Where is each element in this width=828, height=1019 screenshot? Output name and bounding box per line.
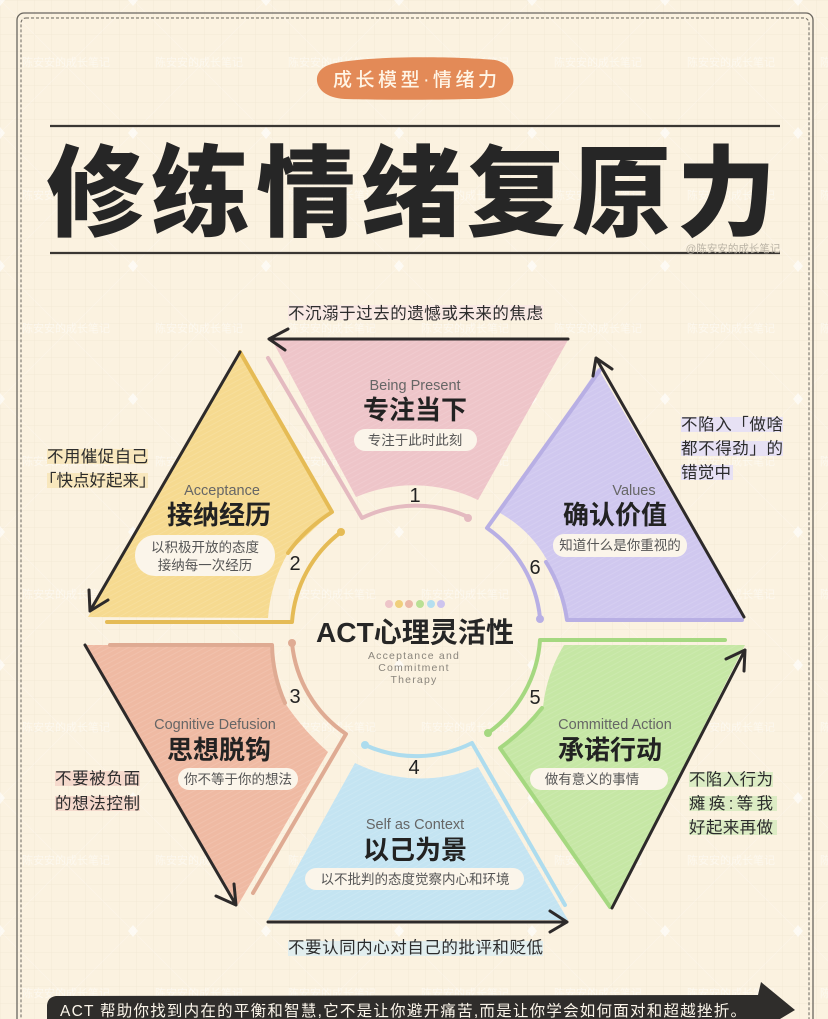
segment 4: self as context: 4	[408, 757, 420, 779]
center label: ACT: Therapy	[391, 674, 437, 686]
segment 1: being present: 1	[409, 485, 421, 507]
segment 1: being present: 专注于此时此刻	[368, 433, 462, 448]
note: left lower	[55, 769, 140, 813]
note: top: 不沉溺于过去的遗憾或未来的焦虑	[288, 304, 543, 323]
center label: ACT	[316, 600, 514, 686]
badge: growth model: 成长模型·情绪力	[333, 69, 497, 91]
segment 6: values	[487, 368, 744, 623]
note: right lower: 好起来再做	[689, 818, 774, 837]
segment 4: self as context	[268, 741, 568, 920]
note: left upper: 「快点好起来」	[40, 471, 156, 490]
segment 2: acceptance: 以积极开放的态度	[151, 540, 259, 555]
badge: growth model	[317, 57, 513, 100]
segment 3: cognitive defusion: 思想脱钩	[167, 735, 271, 765]
segment 5: committed action: 5	[529, 687, 541, 709]
segment 5: committed action: Committed Action	[558, 717, 672, 733]
segment 2: acceptance: 接纳每一次经历	[158, 557, 252, 573]
segment 5: committed action: 承诺行动	[558, 735, 662, 765]
bottom banner arrow	[47, 982, 795, 1019]
segment 2: acceptance: 接纳经历	[167, 500, 271, 530]
note: left upper	[40, 447, 156, 490]
arrow: purple side	[593, 358, 744, 617]
segment 3: cognitive defusion: 你不等于你的想法	[184, 771, 292, 787]
note: left lower: 的想法控制	[55, 794, 140, 813]
note: right upper: 都不得劲」的	[681, 439, 783, 458]
segment 1: being present: 专注当下	[363, 395, 467, 425]
segment 6: values: 6	[529, 557, 541, 579]
segment 1: being present	[268, 340, 568, 522]
note: right lower: 不陷入行为	[689, 770, 773, 789]
note: right upper: 不陷入「做啥	[681, 415, 784, 434]
note: right upper	[681, 415, 784, 482]
note: left lower: 不要被负面	[55, 769, 140, 788]
note: bottom: 不要认同内心对自己的批评和贬低	[288, 938, 543, 957]
title: @陈安安的成长笔记	[686, 242, 781, 255]
segment 6: values: 确认价值	[563, 500, 667, 530]
arrow: salmon side	[85, 645, 236, 905]
note: left upper: 不用催促自己	[47, 447, 148, 466]
note: right lower	[689, 770, 777, 837]
segment 4: self as context: 以己为景	[363, 835, 467, 865]
segment 3: cognitive defusion: Cognitive Defusion	[154, 717, 276, 733]
center label: ACT: Commitment	[378, 662, 450, 674]
segment 2: acceptance: Acceptance	[184, 483, 260, 499]
segment 6: values: Values	[612, 483, 656, 499]
segment 3: cognitive defusion: 3	[289, 686, 301, 708]
note: right lower: 瘫痪:等我	[689, 794, 773, 813]
center label: ACT: ACT心理灵活性	[316, 617, 514, 648]
segment 2: acceptance	[88, 352, 345, 622]
segment 3: cognitive defusion	[85, 639, 346, 905]
segment 2: acceptance: 2	[289, 553, 301, 575]
segment 1: being present: Being Present	[369, 378, 461, 394]
segment 5: committed action: 做有意义的事情	[545, 771, 639, 787]
colour dots	[385, 600, 445, 608]
note: right upper: 错觉中	[681, 463, 731, 482]
arrow: yellow side	[89, 352, 240, 611]
center label: ACT: Acceptance and	[368, 650, 460, 662]
arrow: green side	[612, 650, 745, 908]
segment 4: self as context: 以不批判的态度觉察内心和环境	[320, 871, 510, 887]
segment 4: self as context: Self as Context	[366, 817, 464, 833]
segment 6: values: 知道什么是你重视的	[559, 537, 681, 553]
arrow: top	[269, 329, 568, 350]
title: 修练情绪复原力	[46, 138, 776, 249]
segment 5: committed action	[484, 640, 745, 908]
arrow: bottom	[268, 911, 567, 932]
